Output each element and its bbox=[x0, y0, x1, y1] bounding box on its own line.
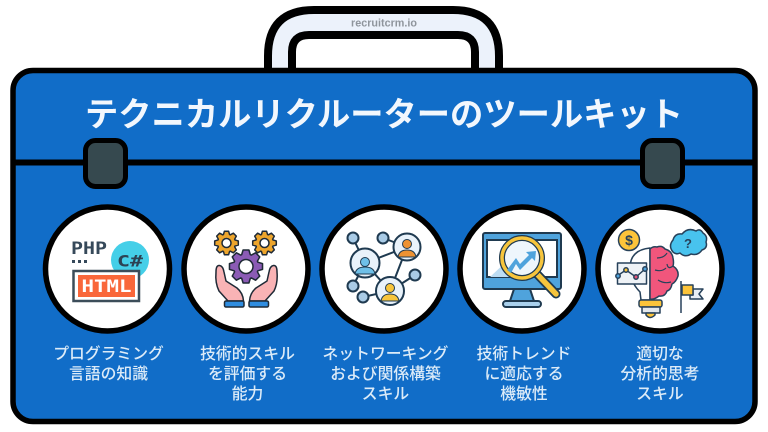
icon: monitor and magnifier bbox=[483, 233, 561, 307]
label 2: 技術的スキル bbox=[200, 345, 295, 363]
circle 2 bbox=[184, 207, 308, 331]
circle 4 bbox=[460, 207, 584, 331]
title: テクニカルリクルーターのツールキット bbox=[85, 97, 683, 134]
watermark: recruitcrm.io bbox=[351, 18, 417, 30]
briefcase handle bbox=[268, 10, 499, 72]
label 1: 言語の知識 bbox=[69, 365, 148, 383]
label 2: 能力 bbox=[232, 385, 263, 403]
label 3: ネットワーキング bbox=[323, 345, 449, 363]
strap line bbox=[14, 160, 754, 166]
label 4: 技術トレンド bbox=[477, 345, 571, 363]
circle 5 bbox=[598, 207, 722, 331]
briefcase body bbox=[13, 70, 755, 422]
icon: gears and hands bbox=[215, 231, 277, 307]
label 3: および関係構築 bbox=[330, 365, 441, 383]
item 1: programming languages bbox=[46, 207, 170, 383]
right latch bbox=[642, 140, 682, 186]
label 1: プログラミング bbox=[53, 345, 164, 363]
label 4: に適応する bbox=[484, 365, 564, 383]
label 2: を評価する bbox=[208, 365, 287, 383]
item 4: tech trends bbox=[460, 207, 584, 403]
left latch bbox=[86, 140, 126, 186]
label 5: スキル bbox=[636, 386, 684, 403]
icon: lightbulb brain bbox=[616, 230, 707, 318]
icon: lightbulb brain: ? bbox=[684, 236, 692, 251]
circle 1 bbox=[46, 207, 170, 331]
item 5: analytical thinking bbox=[598, 207, 722, 403]
label 4: 機敏性 bbox=[500, 385, 548, 403]
icon: people network bbox=[348, 232, 420, 305]
icon: lightbulb brain: $ bbox=[625, 232, 633, 248]
circle 3 bbox=[322, 207, 446, 331]
label 3: スキル bbox=[362, 386, 409, 403]
icon: code languages: C# bbox=[117, 252, 143, 270]
icon: code languages: PHP bbox=[71, 239, 107, 259]
icon: code languages: HTML bbox=[82, 277, 132, 297]
item 2: technical skill assessment bbox=[184, 207, 308, 403]
label 5: 分析的思考 bbox=[620, 365, 700, 383]
label 5: 適切な bbox=[636, 345, 684, 363]
item 3: networking bbox=[322, 207, 449, 403]
icon: code languages bbox=[71, 239, 149, 301]
